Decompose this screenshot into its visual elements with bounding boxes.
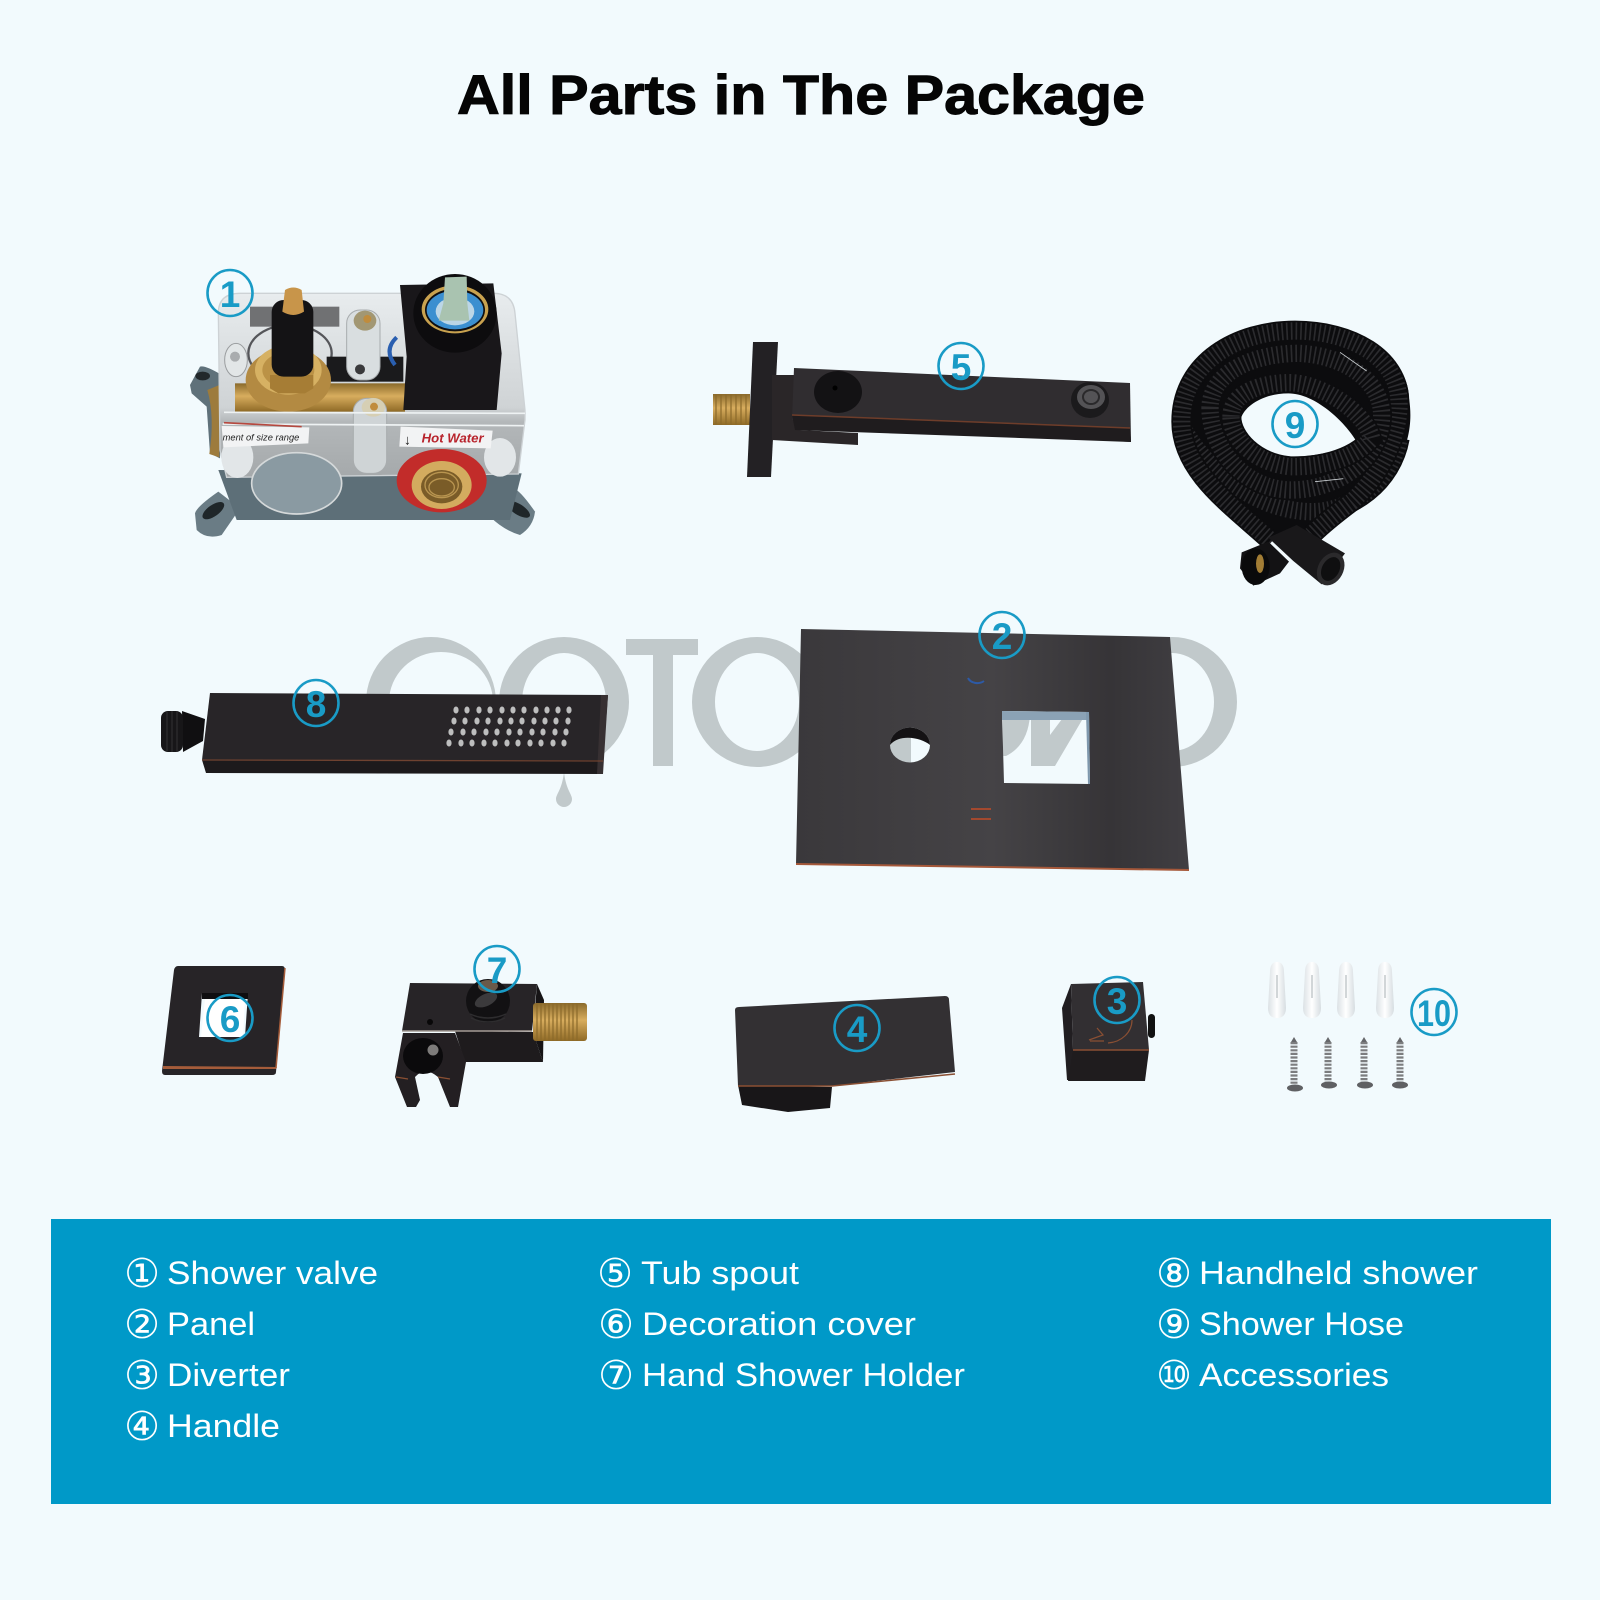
marker 10: 10 [1417, 993, 1451, 1034]
marker 3 [1094, 977, 1140, 1023]
brass body [235, 383, 405, 412]
hot water label: Hot Water [422, 431, 485, 445]
wall anchors [1268, 962, 1394, 1018]
marker 5 [938, 343, 984, 389]
housing base [218, 470, 522, 520]
marker 9 [1272, 401, 1318, 447]
marker 7: 7 [487, 950, 507, 991]
legend column 2: ⑤ [597, 1251, 633, 1297]
legend column 3: Shower Hose [1199, 1306, 1404, 1342]
black stem [272, 300, 313, 377]
side lug [190, 366, 222, 458]
legend column 2: Hand Shower Holder [642, 1357, 965, 1393]
red inlet ring [397, 449, 487, 512]
marker 1: 1 [220, 274, 240, 315]
clear tubes [347, 310, 387, 473]
legend column 3 [1156, 1251, 1478, 1399]
legend column 2: Tub spout [641, 1255, 799, 1291]
marker 8: 8 [306, 684, 326, 725]
marker 2: 2 [992, 616, 1012, 657]
left label: ment of size range [223, 433, 299, 443]
marker 6: 6 [220, 999, 240, 1040]
hose connectors [1240, 525, 1350, 590]
legend column 2: Decoration cover [642, 1306, 916, 1342]
screw [225, 343, 247, 377]
part 9: shower hose [1172, 321, 1410, 590]
hot water label [399, 427, 493, 448]
part 8: handheld shower [161, 693, 608, 774]
legend column 1: Handle [167, 1408, 280, 1444]
marker 8 [294, 680, 338, 726]
part 1: shower valve [190, 274, 535, 537]
legend column 1: Shower valve [167, 1255, 378, 1291]
legend column 2: ⑥ [598, 1302, 634, 1348]
legend column 1: ① [124, 1251, 160, 1297]
left label [222, 423, 309, 447]
holder clip [395, 1033, 466, 1107]
legend column 1: Diverter [167, 1357, 290, 1393]
marker 9: 9 [1285, 405, 1305, 446]
legend column 3: Handheld shower [1199, 1255, 1478, 1291]
clear case [218, 293, 525, 477]
case rim [223, 412, 525, 426]
legend panel [51, 1219, 1551, 1504]
legend column 3: ⑩ [1156, 1353, 1192, 1399]
cartridge block [400, 274, 502, 410]
legend column 1: Panel [167, 1306, 255, 1342]
part 4: handle [735, 996, 955, 1112]
part 5: tub spout [713, 342, 1131, 477]
legend column 3: ⑧ [1156, 1251, 1192, 1297]
legend column 1: ④ [124, 1404, 160, 1450]
part 6: decoration cover [162, 966, 285, 1075]
marker 4: 4 [847, 1009, 868, 1050]
legend column 2 [597, 1251, 965, 1399]
part 2: panel [796, 629, 1189, 871]
aerator [1071, 382, 1109, 418]
legend column 3: Accessories [1199, 1357, 1389, 1393]
gray plug [252, 453, 342, 514]
brass thread [533, 1003, 587, 1041]
legend column 1: ② [124, 1302, 160, 1348]
marker 7 [474, 946, 520, 992]
marker 2 [980, 612, 1024, 658]
legend column 1: ③ [124, 1353, 160, 1399]
part 7: hand shower holder [395, 979, 587, 1107]
watermark logo [366, 637, 1237, 807]
hot water label: ↓ [404, 431, 411, 447]
bottom lugs [195, 492, 240, 537]
title: All Parts in The Package [457, 63, 1145, 126]
marker 6 [208, 995, 252, 1041]
legend column 2: ⑦ [598, 1353, 634, 1399]
marker 1 [208, 270, 252, 316]
spray nozzles [446, 706, 572, 746]
marker 4 [834, 1005, 880, 1051]
lower bumps [221, 437, 253, 478]
legend column 3: ⑨ [1156, 1302, 1192, 1348]
screws [1287, 1037, 1408, 1092]
holder knob [466, 979, 510, 1023]
marker 5: 5 [951, 347, 971, 388]
part 3: diverter [1062, 982, 1155, 1081]
marker 3: 3 [1107, 981, 1127, 1022]
spout knob [814, 371, 862, 413]
legend column 1 [124, 1251, 378, 1450]
part 10: accessories [1268, 962, 1408, 1092]
